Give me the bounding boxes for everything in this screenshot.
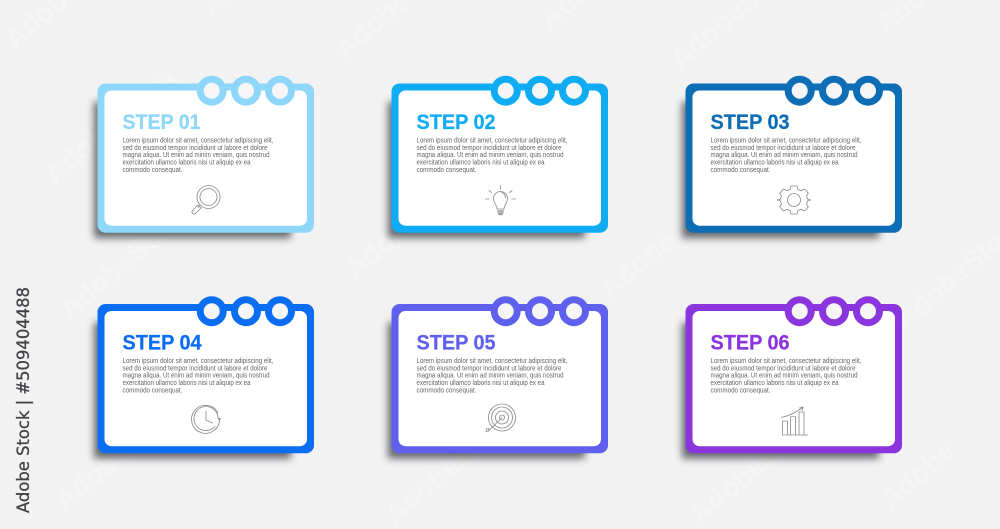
text block: step 05: exercitation ullamco laboris nisi ut aliquip ex ea [416,380,545,387]
text block: step 04 [122,358,274,395]
panel: step 01 [94,76,314,238]
text: Adobe [339,205,426,285]
text block: step 03: Lorem ipsum dolor sit amet, consectetur adipiscing elit, [710,137,862,144]
icon: target [486,404,516,432]
text: AdobeStock [49,388,194,517]
text: Adobe [594,225,681,305]
icon: magnifying glass [192,186,220,214]
heading: step 06: STEP 06 [710,330,790,354]
text block: step 06 [710,358,862,395]
icon: clock [192,405,220,433]
text: AdobeStock [54,196,199,325]
heading: step 03: STEP 03 [710,110,790,134]
text: AdobeStock [39,61,184,190]
text block: step 01 [122,137,274,174]
text block: step 05: magna aliqua. Ut enim ad minim veniam, quis nostrud [416,373,564,380]
text block: step 01: exercitation ullamco laboris nisi ut aliquip ex ea [122,160,251,167]
text block: step 06: magna aliqua. Ut enim ad minim veniam, quis nostrud [710,373,858,380]
text block: step 02: sed do eiusmod tempor incididunt ut labore et dolore [416,145,562,152]
panel: step 06 [682,296,902,458]
text block: step 01: magna aliqua. Ut enim ad minim veniam, quis nostrud [122,152,270,159]
text block: step 05 [416,358,568,395]
text block: step 01: commodo consequat. [122,167,183,174]
heading: step 02: STEP 02 [416,110,496,134]
side credit text: Adobe Stock | #509404488 [14,287,34,513]
text block: step 03: magna aliqua. Ut enim ad minim veniam, quis nostrud [710,152,858,159]
heading: step 01: STEP 01 [122,110,201,134]
text block: step 05: sed do eiusmod tempor incididunt ut labore et dolore [416,365,562,372]
text block: step 03: exercitation ullamco laboris nisi ut aliquip ex ea [710,160,839,167]
text block: step 06: Lorem ipsum dolor sit amet, consectetur adipiscing elit, [710,358,862,365]
panel: step 05 [388,296,608,458]
heading: step 05: STEP 05 [416,330,496,354]
text block: step 05: Lorem ipsum dolor sit amet, consectetur adipiscing elit, [416,358,568,365]
text: AdobeStock [379,401,524,529]
text block: step 06: sed do eiusmod tempor incididunt ut labore et dolore [710,365,856,372]
text: Adobe [874,435,961,515]
panel: step 02 [388,76,608,238]
icon: rising bar chart [782,407,808,435]
text block: step 04: magna aliqua. Ut enim ad minim veniam, quis nostrud [122,373,270,380]
icon: light bulb [486,186,516,214]
text block: step 02: Lorem ipsum dolor sit amet, consectetur adipiscing elit, [416,137,568,144]
text block: step 06: exercitation ullamco laboris nisi ut aliquip ex ea [710,380,839,387]
text block: step 03: sed do eiusmod tempor incididunt ut labore et dolore [710,145,856,152]
heading: step 04: STEP 04 [122,330,202,354]
text block: step 01: Lorem ipsum dolor sit amet, consectetur adipiscing elit, [122,137,274,144]
panel: step 04 [94,296,314,458]
text block: step 04: sed do eiusmod tempor incididunt ut labore et dolore [122,365,268,372]
icon: gear [777,186,811,214]
text block: step 02 [416,137,568,174]
text block: step 05: commodo consequat. [416,388,477,395]
text block: step 01: sed do eiusmod tempor incididunt ut labore et dolore [122,145,268,152]
text block: step 03 [710,137,862,174]
text block: step 06: commodo consequat. [710,388,771,395]
text block: step 04: commodo consequat. [122,388,183,395]
text block: step 02: magna aliqua. Ut enim ad minim veniam, quis nostrud [416,152,564,159]
text block: step 04: exercitation ullamco laboris nisi ut aliquip ex ea [122,380,251,387]
text: AdobeStock [684,401,829,529]
panel: step 03 [682,76,902,238]
text block: step 02: exercitation ullamco laboris nisi ut aliquip ex ea [416,160,545,167]
text block: step 03: commodo consequat. [710,167,771,174]
text block: step 04: Lorem ipsum dolor sit amet, consectetur adipiscing elit, [122,358,274,365]
text block: step 02: commodo consequat. [416,167,477,174]
